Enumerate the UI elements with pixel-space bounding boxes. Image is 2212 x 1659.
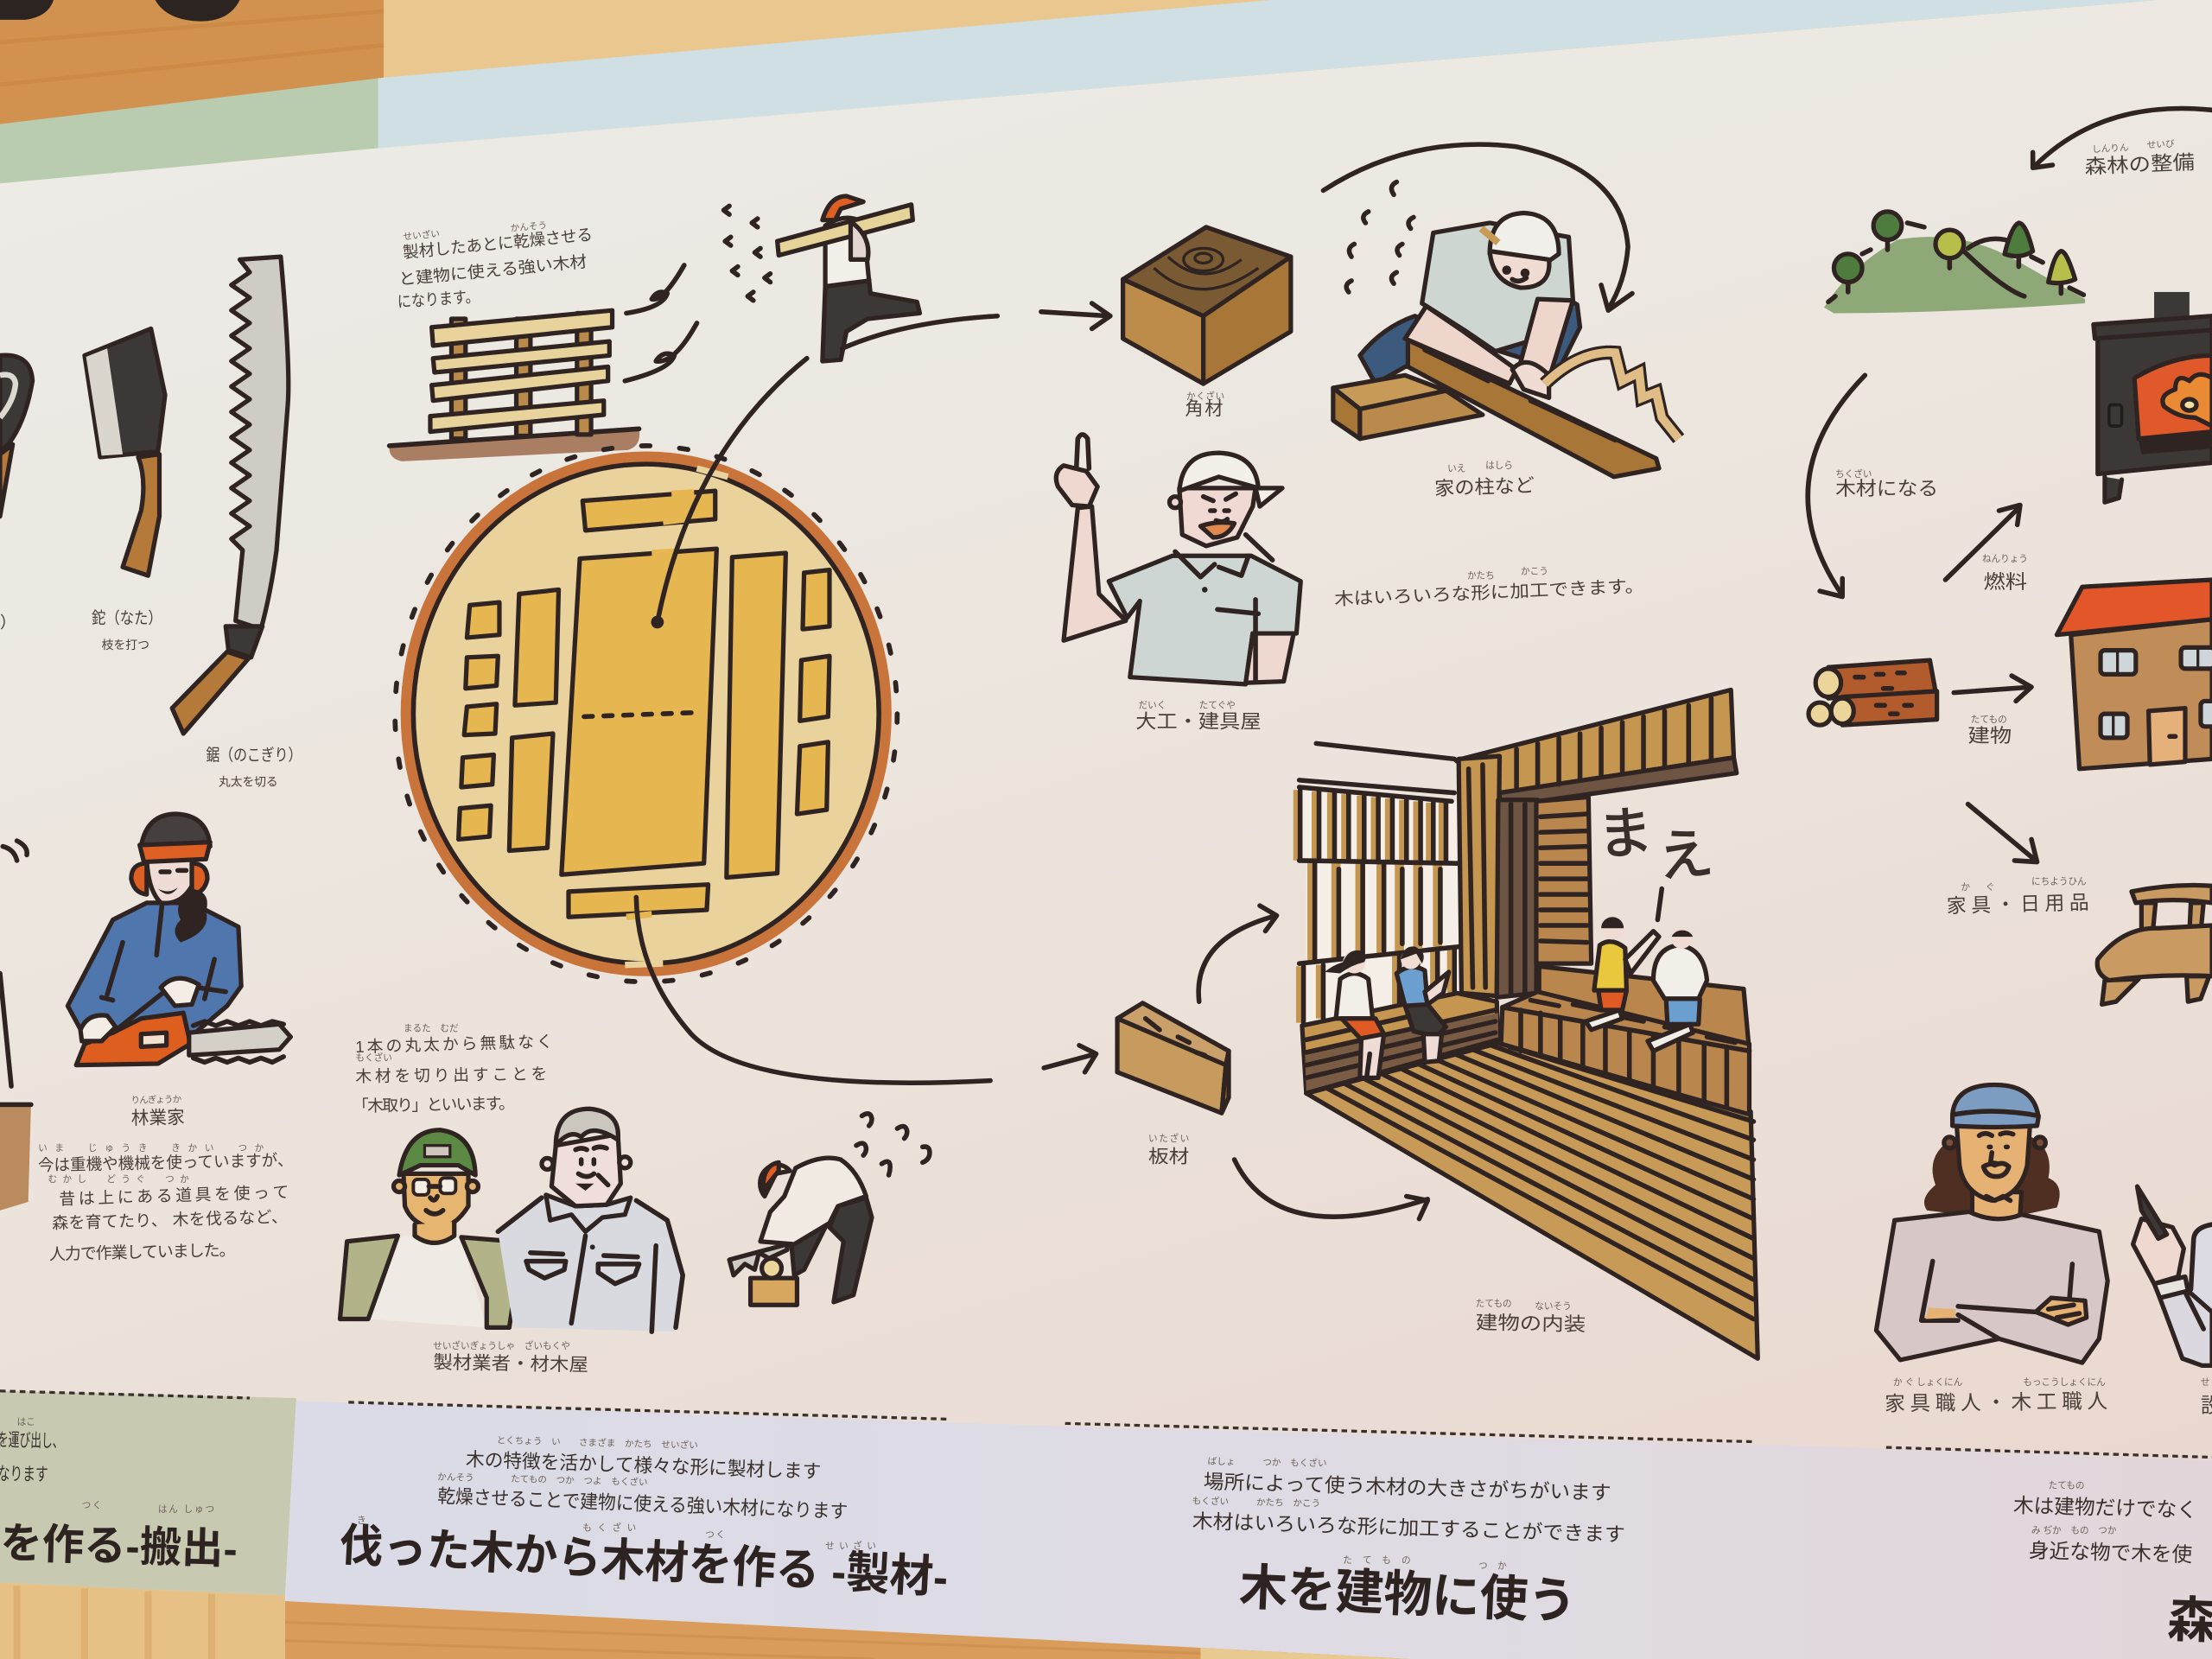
label: interior: 建物の内装 [1476, 1312, 1586, 1335]
icon: sawdust marks near worker [724, 206, 770, 301]
text block: drying note: になります。 [397, 287, 480, 311]
man in work jacket [498, 1109, 683, 1332]
icon: saw [172, 257, 289, 734]
upper beam [1456, 690, 1737, 807]
caption: use in buildings: たてもの [1343, 1555, 1411, 1566]
icon: plank board [1117, 1003, 1229, 1113]
label: craftsmen [1885, 1377, 2107, 1416]
icon: sickle (partial) [0, 355, 33, 517]
illustration: building interior [1298, 690, 1758, 1358]
caption strip: lavender [285, 1401, 2212, 1659]
caption strip: green [0, 1391, 296, 1596]
label: saw: 丸太を切る [219, 774, 278, 788]
caption: sawing: き [357, 1516, 366, 1526]
illustration: furniture craftsman [1876, 1085, 2107, 1363]
label: furniture and daily goods: か ぐ [1961, 882, 1995, 893]
pillar [1459, 756, 1500, 996]
text block: forester description: 人力で作業していました。 [49, 1241, 236, 1264]
label: forester: りんぎょうか [130, 1094, 182, 1106]
illustration: worker carrying lumber [778, 196, 919, 361]
text: children call: え [1654, 821, 1716, 889]
label: forest maintenance: 森林の整備 [2084, 150, 2196, 178]
label: nata: 鉈（なた） [92, 609, 162, 627]
text block: processing note: かこう [1521, 566, 1548, 576]
arrow: to fuel [1945, 505, 2020, 580]
illustration: chair [2097, 885, 2212, 1004]
text block: processing note [1334, 566, 1645, 609]
label: fuel [1982, 554, 2028, 593]
text: children call: ま [1595, 800, 1656, 867]
illustration: log cross-section cutting diagram [395, 446, 897, 982]
label: building: 建物 [1968, 725, 2012, 747]
text block: forester description: 昔 は 上 に あ る 道 具 を 使 っ て [59, 1183, 289, 1209]
text block: forester description: 今は重機や機械を使っていますが、 [38, 1151, 294, 1175]
illustration: small worker sawing [729, 1158, 872, 1305]
text block: kidori note: もくざい [355, 1052, 392, 1064]
caption: hauling (partial): はん しゅつ [158, 1504, 214, 1515]
left bench [1302, 993, 1498, 1093]
text block: processing note: かたち [1467, 570, 1495, 581]
text block: forester description: 森を育てたり、 木を伐るなど、 [52, 1207, 288, 1233]
label: becomes lumber: ちくざい [1835, 468, 1872, 480]
wood wall: bottom [0, 1583, 1411, 1659]
icon: hatchet (nata) [85, 328, 165, 575]
caption: sawing: 乾燥させることで建物に使える強い木材になります [437, 1485, 849, 1522]
illustration: carpenter planing a post [1333, 213, 1679, 477]
label: post [1434, 461, 1535, 499]
text block: forester description: いま じゅうき きかい つか [38, 1143, 264, 1154]
caption: use in buildings: 木材はいろいろな形に加工することができます [1192, 1510, 1625, 1546]
icon: stacked logs [1808, 660, 1937, 725]
text block: kidori note [353, 1023, 553, 1116]
text block: forester description [38, 1143, 294, 1264]
caption: sawing: もくざい [582, 1522, 636, 1533]
arrow: plank to wall [1198, 906, 1277, 1001]
label: furniture and daily goods: 家具・日用品 [1947, 891, 2089, 917]
text block: drying note [397, 220, 594, 311]
caption: sawing: つく [705, 1530, 725, 1541]
caption: sawing: かんそう たてもの つか つよ もくざい [437, 1471, 648, 1488]
text block: kidori note: 1本の丸太から無駄なく [355, 1033, 553, 1056]
caption: use in buildings: 木を建物に使う [1238, 1560, 1578, 1630]
person standing: white shirt [1648, 927, 1707, 1051]
caption: use in buildings: 場所によって使う木材の大きさがちがいます [1204, 1470, 1611, 1504]
illustration: sawmill workers [340, 1109, 683, 1332]
label: post: はしら [1485, 461, 1513, 471]
caption: daily use (partial): み ぢか もの つか [2031, 1525, 2117, 1536]
text block: kidori note: まるた むだ [404, 1023, 459, 1033]
caption: daily use (partial) [2013, 1480, 2212, 1649]
chainsaw [76, 1013, 190, 1065]
label: post: いえ [1447, 463, 1465, 474]
text block: drying note: 製材したあとに乾燥させる [402, 226, 594, 262]
floor [1306, 1043, 1758, 1358]
label: carpenter [1135, 701, 1262, 732]
caption: sawing: とくちょう い さまざま かたち せいざい [497, 1434, 698, 1451]
caption: use in buildings: もくざい かたち かこう [1192, 1495, 1320, 1510]
label: plank: いたざい [1148, 1133, 1189, 1144]
icon: wind curls [625, 265, 697, 381]
text block: kidori note: 木材を切り出すことを [355, 1065, 548, 1085]
label: interior: たてもの [1476, 1299, 1512, 1309]
label: square timber: 角材 [1185, 398, 1224, 419]
label: square timber [1185, 391, 1224, 419]
label: forest maintenance: せいび [2146, 139, 2175, 150]
label: becomes lumber [1835, 468, 1938, 499]
label: furniture and daily goods [1947, 877, 2089, 917]
person sitting: blue shirt [1396, 946, 1449, 1062]
illustration: wood stove [2094, 292, 2212, 502]
icon: square timber cube [1123, 227, 1291, 384]
icon: wood shavings marks [1346, 182, 1414, 292]
label: furniture and daily goods: にちようひん [2031, 877, 2087, 887]
label: forester: 林業家 [131, 1107, 185, 1128]
caption: use in buildings [1192, 1456, 1625, 1630]
label: saw [206, 746, 302, 788]
label: square timber: かくざい [1186, 391, 1224, 402]
caption: sawing [338, 1434, 950, 1604]
label: nata: 枝を打つ [102, 638, 149, 652]
text block: drying note: せいざい [403, 228, 440, 243]
label: interior [1476, 1299, 1586, 1335]
dashed strip borders [0, 1391, 2212, 1458]
label: craftsmen: 家具職人・木工職人 [1885, 1390, 2107, 1416]
label: sawmill workers [433, 1340, 588, 1376]
person sitting: white shirt [1325, 950, 1384, 1077]
caption: sawing: 木の特徴を活かして様々な形に製材します [466, 1448, 822, 1483]
label: designer partial: せ [2201, 1377, 2210, 1388]
label: nata: ） [0, 613, 16, 632]
text block: drying note: かんそう [510, 220, 548, 234]
arrow: becomes lumber [1808, 375, 1865, 597]
label: plank [1148, 1133, 1189, 1166]
label: interior: ないそう [1535, 1301, 1572, 1312]
arrow: to furniture [1968, 804, 2037, 862]
arrow: plank to floor [1235, 1160, 1427, 1219]
caption: hauling (partial): つく [82, 1500, 102, 1510]
label: fuel: ねんりょう [1982, 554, 2028, 564]
icon: sweat marks [856, 1114, 930, 1175]
caption: daily use (partial): 身近な物で木を使 [2029, 1539, 2193, 1567]
label: forest maintenance [2084, 139, 2196, 178]
label: forest maintenance: しんりん [2092, 143, 2129, 155]
man in green cap [340, 1130, 519, 1327]
arrow: from center board up through worker to square timber [651, 303, 1110, 628]
caption: hauling (partial): はこ [17, 1417, 35, 1427]
label: sawmill workers: せいざいぎょうしゃ ざいもくや [433, 1340, 570, 1351]
illustration: house [2056, 580, 2212, 769]
caption: sawing: せいざい [825, 1541, 876, 1552]
illustration: drying lumber stack [389, 310, 639, 461]
label: craftsmen: もっこうしょくにん [2023, 1377, 2106, 1388]
label: designer partial [2201, 1377, 2212, 1417]
right bench [1501, 992, 1749, 1115]
caption: use in buildings: ばしょ つか もくざい [1207, 1456, 1327, 1469]
caption: use in buildings: つか [1478, 1561, 1507, 1572]
label: saw: 鋸（のこぎり） [206, 746, 302, 764]
label: nata [0, 609, 162, 652]
arrow: from bottom board to plank [636, 897, 1096, 1083]
label: building: たてもの [1971, 715, 2007, 725]
person standing: yellow shirt [1586, 917, 1659, 1030]
illustration: forested hill [1824, 212, 2085, 313]
label: becomes lumber: 木材になる [1835, 478, 1938, 499]
arrow: curved over carpenter [1323, 144, 1632, 310]
label: plank: 板材 [1148, 1146, 1189, 1166]
label: post: 家の柱など [1434, 474, 1535, 499]
label: carpenter: 大工・建具屋 [1135, 710, 1262, 732]
label: forester [130, 1094, 185, 1128]
text block: kidori note: 「木取り」といいます。 [353, 1094, 515, 1116]
label: fuel: 燃料 [1984, 571, 2027, 593]
text block: drying note: と建物に使える強い木材 [397, 252, 588, 289]
illustration: designer partial with pen [2133, 1186, 2212, 1365]
text: children call [1595, 800, 1716, 919]
icon: partial log and motion marks [0, 841, 31, 1211]
arrow: forest maintenance return [2033, 108, 2212, 168]
left wall slats [1298, 743, 1461, 1026]
text block: processing note: 木はいろいろな形に加工できます。 [1334, 576, 1645, 609]
label: building [1968, 715, 2012, 747]
caption: hauling (partial) [0, 1417, 238, 1573]
label: craftsmen: か ぐ しょくにん [1893, 1377, 1963, 1388]
label: carpenter: たてぐや [1199, 701, 1236, 711]
caption: sawing: 伐った木から木材を作る -製材- [338, 1521, 950, 1604]
text block: forester description: むかし どうぐ つか [48, 1174, 189, 1185]
arrow: to building [1954, 676, 2031, 701]
caption: hauling (partial): を運び出し、 [0, 1429, 64, 1452]
illustration: forester woman with chainsaw [67, 814, 290, 1065]
wood wall: top [0, 0, 1269, 124]
caption: hauling (partial): を作る-搬出- [0, 1520, 238, 1573]
illustration: carpenter pointing up [1056, 435, 1300, 684]
label: sawmill workers: 製材業者・材木屋 [433, 1352, 588, 1376]
caption: daily use (partial): 木は建物だけでなく [2013, 1494, 2197, 1522]
caption: daily use (partial): たてもの [2049, 1480, 2085, 1491]
label: carpenter: だいく [1139, 701, 1166, 711]
